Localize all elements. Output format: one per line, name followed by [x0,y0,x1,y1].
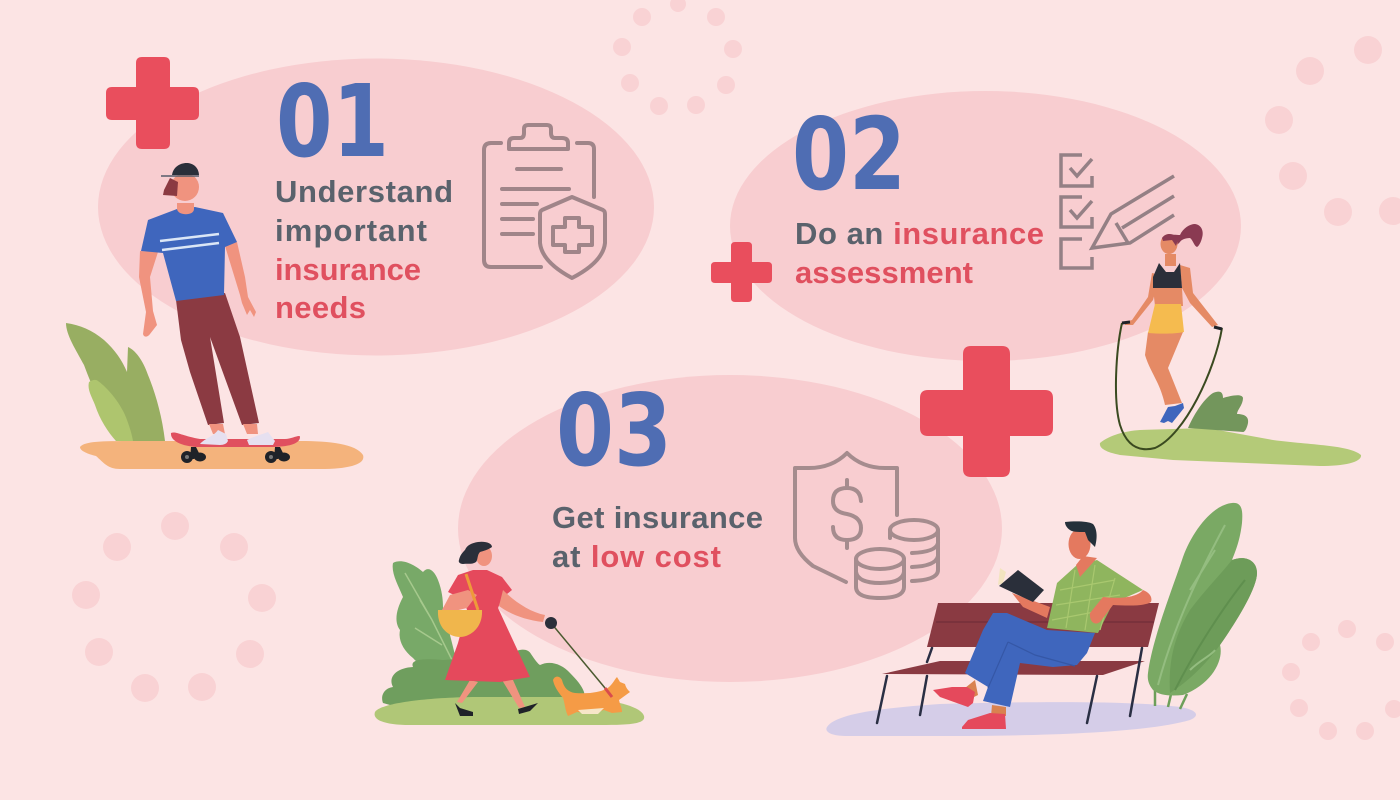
text block: step 2: Do an insurance [795,216,1044,251]
heading: number 03: 03 [556,372,672,489]
text block: step 1: insurance [275,252,421,287]
heading: number 01: 01 [276,63,389,180]
icon: red cross 1 [106,57,199,149]
icon: checklist and pencil [1061,155,1174,268]
text block: step 2 [795,216,1044,290]
panel: step 3 ellipse [458,375,1002,682]
panel: step 1 ellipse [98,58,654,356]
icon: red cross 3 [920,346,1053,477]
text block: step 3 [552,500,763,574]
illustration: skateboarder [66,163,363,469]
text block: step 1: important [275,213,427,248]
text block: step 1: needs [275,290,366,325]
illustration: woman jumping rope [1100,224,1361,466]
text block: step 2: assessment [795,255,973,290]
text block: step 1 [275,174,453,325]
heading: number 02: 02 [792,96,906,213]
text block: step 3: Get insurance [552,500,763,535]
illustration: woman walking dog [375,542,644,725]
panel: step 2 ellipse [730,91,1241,361]
icon: red cross 2 [711,242,772,302]
icon: clipboard with shield [484,125,605,278]
illustration: man reading on bench [826,503,1257,736]
icon: shield with dollar and coins [795,453,938,598]
text block: step 1: Understand [275,174,453,209]
text block: step 3: at low cost [552,539,721,574]
